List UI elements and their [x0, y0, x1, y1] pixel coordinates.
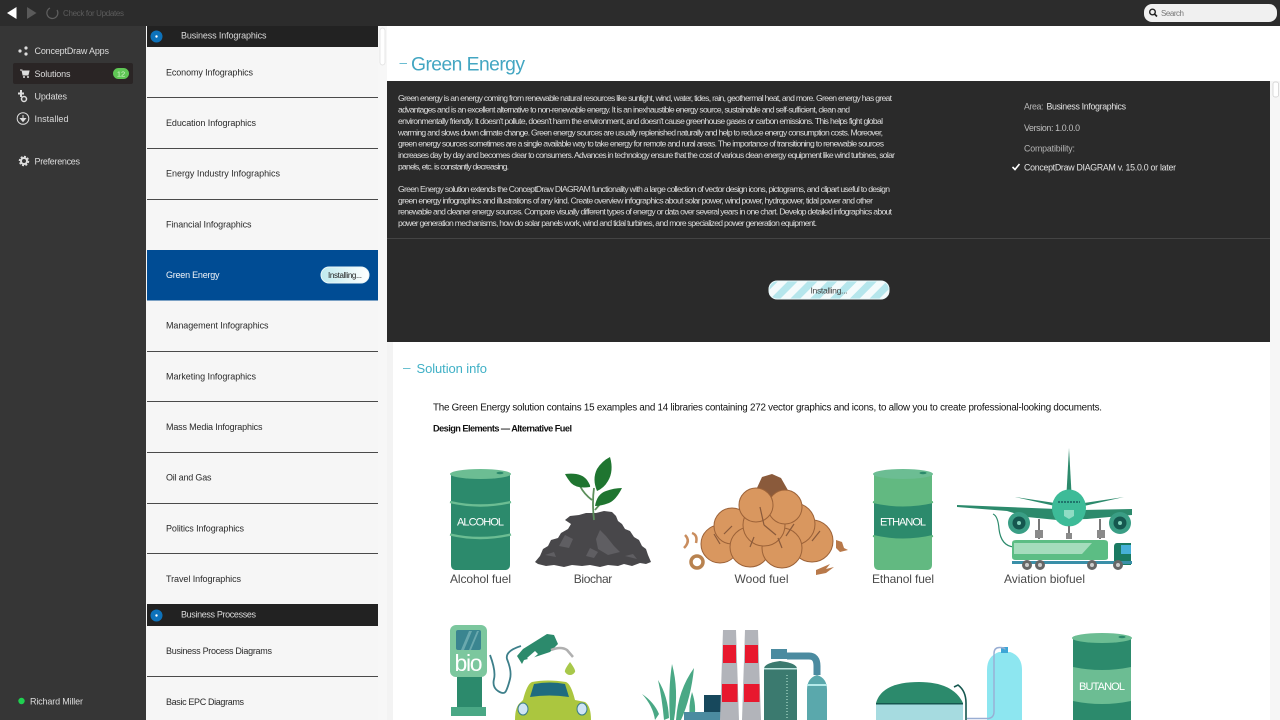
check for updates label: Check for Updates [63, 9, 124, 18]
illustration: bio fuel pump and car: bio [454, 650, 482, 676]
illustration: Biochar pile with plant [535, 457, 651, 586]
solution metadata: Version: 1.0.0.0 [1024, 123, 1080, 133]
illustration: bio fuel pump and car [450, 625, 591, 720]
category header: Business Infographics: Business Infographics [181, 30, 267, 40]
description paragraph 2 [398, 184, 893, 228]
illustration: Ethanol fuel barrel [872, 469, 934, 586]
description paragraph 2: Green Energy solution extends the ConceptDraw DIAGRAM functionality with a large collection of vector design icons, pictograms, and clipart useful to design [398, 184, 890, 194]
list item: Oil and Gas: Oil and Gas [166, 472, 212, 482]
search box [1144, 4, 1277, 22]
description paragraph 1: panels, etc. is constantly decreasing. [398, 162, 509, 172]
illustration: Wood fuel logs [684, 474, 848, 586]
list item: Energy Industry Infographics: Energy Industry Infographics [166, 168, 280, 178]
icon: back arrow [7, 7, 16, 19]
nav item: ConceptDraw Apps: ConceptDraw Apps [34, 46, 110, 56]
category header: Business Infographics [147, 26, 378, 47]
left navigation sidebar [0, 26, 146, 720]
solutions list panel [146, 26, 387, 720]
nav item: Installed [17, 113, 68, 124]
nav item: Solutions selected: 12 [117, 70, 125, 78]
illustration: Aviation biofuel plane and truck [957, 448, 1132, 586]
illustration: Butanol barrel: BUTANOL [1079, 681, 1125, 693]
nav item: Solutions selected: Solutions [34, 69, 71, 79]
top toolbar [0, 0, 1280, 26]
description paragraph 1 [397, 93, 895, 172]
description paragraph 2: green energy infographics and illustrations of any kind. Create overview infographics about solar power, wind power, hydropower, tidal power and other [398, 195, 873, 205]
description paragraph 1: increases day by day and becomes clear to consumers. Advances in technology ensure that the cost of various clean energy equipment like wind turbines, solar [398, 150, 895, 160]
selected list item: Green Energy [147, 250, 378, 300]
illustration: Alcohol fuel barrel [450, 469, 511, 586]
illustration: Ethanol fuel barrel: ETHANOL [880, 516, 926, 528]
section heading: Solution info: Solution info [416, 361, 487, 376]
installing progress bar: Installing... [810, 286, 848, 296]
icon: refresh [47, 8, 58, 18]
solution metadata: Compatibility: [1024, 144, 1075, 154]
left content edge [387, 342, 393, 720]
category header: Business Processes [147, 604, 378, 626]
caption: Wood fuel [734, 572, 788, 586]
icon: forward arrow [27, 7, 36, 19]
search box: Search [1161, 9, 1184, 18]
description paragraph 1: advantages and is an excellent alternative to non-renewable energy. It is an inexhaustible energy source, sustainable and self-sufficient, clean and [398, 104, 850, 114]
solution metadata [1012, 102, 1176, 172]
illustration: biofuel factory [642, 630, 827, 720]
list item: Basic EPC Diagrams: Basic EPC Diagrams [166, 697, 244, 707]
caption: Biochar [574, 572, 612, 586]
description paragraph 2: renewable and cleaner energy sources. Compare visually different types of energy or data over several years in one chart. Develop detailed infographics about [398, 207, 893, 217]
solution metadata: ConceptDraw DIAGRAM v. 15.0.0 or later [1024, 162, 1176, 172]
selected list item: Green Energy: Installing... [328, 271, 362, 280]
caption: Ethanol fuel [872, 572, 934, 586]
illustration: Butanol barrel [1072, 633, 1132, 720]
solution metadata: Business Infographics [1046, 102, 1127, 112]
description paragraph 1: Green energy is an energy coming from renewable natural resources like sunlight, wind, water, tides, rain, geothermal heat, and more. Green energy has great [398, 93, 893, 103]
solution metadata: Area: [1024, 102, 1044, 112]
nav item: Installed: Installed [34, 114, 68, 124]
description paragraph 1: warming and slows down climate change. Green energy sources are usually replenished naturally and help to reduce energy consumption costs. Moreover, [397, 127, 883, 137]
dark description panel [387, 81, 1270, 342]
list scrollbar [380, 28, 385, 65]
nav item: Updates: Updates [34, 92, 68, 102]
solution intro sentence: The Green Energy solution contains 15 examples and 14 libraries containing 272 vector graphics and icons, to allow you to create professional-looking documents. [433, 402, 1102, 414]
nav item: Updates [18, 90, 68, 102]
page title: Green Energy [411, 54, 525, 76]
description paragraph 1: environmentally friendly. It doesn't pollute, doesn't harm the environment, and doesn't cause greenhouse gases or carbon emissions. This helps fight global [398, 116, 883, 126]
caption: Aviation biofuel [1004, 572, 1085, 586]
nav item: Solutions selected [13, 63, 133, 84]
category header: Business Processes: Business Processes [181, 610, 256, 620]
list item: Marketing Infographics: Marketing Infographics [166, 372, 256, 382]
user status: Richard Miller [30, 696, 83, 706]
nav item: Preferences: Preferences [34, 156, 80, 166]
illustration: Alcohol fuel barrel: ALCOHOL [457, 516, 504, 528]
description paragraph 2: power generation mechanisms, how do solar panels work, wind and tidal turbines, and more specialized power generation equipment. [398, 218, 817, 228]
installing progress bar [769, 281, 889, 299]
list item: Politics Infographics: Politics Infographics [166, 524, 244, 534]
list item: Economy Infographics: Economy Infographics [166, 68, 254, 78]
illustration: biogas digester [876, 647, 1022, 720]
list item: Travel Infographics: Travel Infographics [166, 574, 242, 584]
caption: Alcohol fuel [450, 572, 511, 586]
list item: Mass Media Infographics: Mass Media Infographics [166, 422, 263, 432]
list item: Financial Infographics: Financial Infographics [166, 220, 252, 230]
description paragraph 1: green energy sources sometimes are a single available way to take energy for remote and rural areas. The importance of transitioning to renewable sources [398, 139, 884, 149]
list item: Education Infographics: Education Infographics [166, 118, 256, 128]
list item: Business Process Diagrams: Business Process Diagrams [166, 646, 272, 656]
list item: Management Infographics: Management Infographics [166, 320, 269, 330]
right scrollbar [1270, 81, 1280, 720]
selected list item: Green Energy: Green Energy [166, 270, 220, 280]
design elements subheading: Design Elements — Alternative Fuel [433, 424, 572, 434]
